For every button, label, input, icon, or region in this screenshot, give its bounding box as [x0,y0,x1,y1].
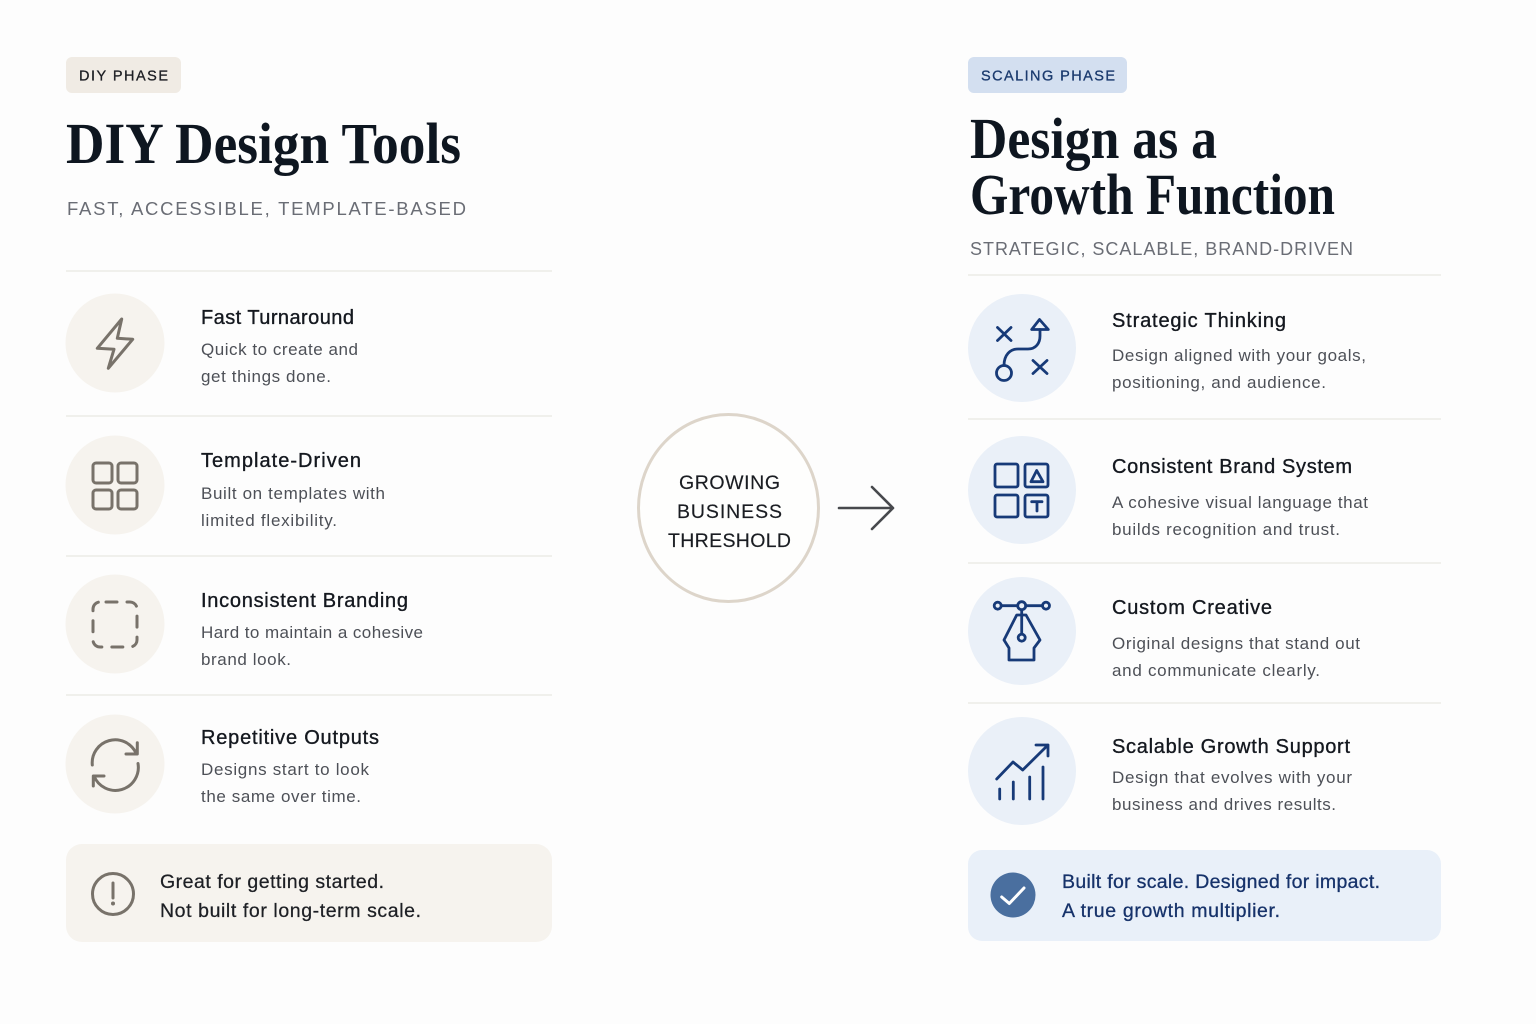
heading: DIY Design Tools: DIY Design Tools [66,111,461,176]
icon: growth chart [968,717,1076,825]
row: Fast Turnaround [66,294,358,392]
text: Repetitive Outputs [201,727,379,806]
row: Scalable Growth Support [968,717,1352,825]
text: Consistent Brand System [1112,456,1368,539]
text: Template-Driven [201,450,385,530]
text: Fast Turnaround [201,307,358,386]
row: Repetitive Outputs [66,714,379,814]
arrow [839,487,893,529]
threshold circle: THRESHOLD [668,530,791,552]
icon: brand system blocks [968,436,1076,544]
heading: Design as a Growth Function: Design as a [970,106,1217,171]
text: Custom Creative: Custom Creative [1112,597,1272,619]
icon: pen tool [968,577,1076,685]
callout: DIY: Not built for long-term scale. [160,900,421,922]
icon: lightning bolt [66,294,164,392]
callout: scaling [968,850,1441,941]
callout: scaling: Built for scale. Designed for impact. [1062,871,1380,893]
icon: refresh arrows [66,714,164,814]
icon: dashed square [66,574,164,674]
threshold circle [638,414,818,602]
text: Scalable Growth Support: business and drives results. [1112,795,1336,814]
icon: check [990,872,1036,918]
heading: Design as a Growth Function [970,106,1335,227]
text: Scalable Growth Support: Scalable Growth Support [1112,736,1350,758]
text: Inconsistent Branding [201,590,423,669]
text: Consistent Brand System: Consistent Brand System [1112,456,1352,478]
text: Scalable Growth Support: Design that evolves with your [1112,768,1352,787]
text: Custom Creative: and communicate clearly. [1112,661,1320,680]
text: Strategic Thinking: positioning, and audience. [1112,373,1326,392]
threshold circle: GROWING [679,472,780,494]
panel: DIY phase [66,57,552,942]
icon: template grid [66,436,164,534]
text: Inconsistent Branding: Inconsistent Branding [201,590,408,612]
text: Consistent Brand System: A cohesive visual language that [1112,493,1368,512]
text: Fast Turnaround: get things done. [201,367,331,386]
badge: DIY phase: DIY PHASE [79,68,168,84]
text: Repetitive Outputs: Repetitive Outputs [201,727,379,749]
text: Custom Creative [1112,597,1360,680]
row: Strategic Thinking [968,294,1366,402]
heading: Design as a Growth Function: Growth Function [970,162,1335,227]
text: Fast Turnaround: Fast Turnaround [201,307,354,329]
text: Scalable Growth Support [1112,736,1352,814]
row: Inconsistent Branding [66,574,423,674]
text: Consistent Brand System: builds recognition and trust. [1112,520,1340,539]
icon: strategy path [968,294,1076,402]
row: Consistent Brand System [968,436,1368,544]
text: Strategic Thinking: Design aligned with your goals, [1112,346,1366,365]
badge: DIY phase [66,57,181,93]
threshold circle: BUSINESS [677,501,782,523]
text: Template-Driven: Template-Driven [201,450,361,472]
text: Strategic Thinking: Strategic Thinking [1112,310,1286,332]
panel: scaling phase [968,57,1441,941]
text: Custom Creative: Original designs that stand out [1112,634,1360,653]
badge: scaling phase [968,57,1127,93]
subtitle: scaling: STRATEGIC, SCALABLE, BRAND-DRIVEN [970,239,1353,259]
text: Fast Turnaround: Quick to create and [201,340,358,359]
callout: DIY [66,844,552,942]
row: Template-Driven [66,436,385,534]
text: Strategic Thinking [1112,310,1366,392]
text: Template-Driven: Built on templates with [201,484,385,503]
badge: scaling phase: SCALING PHASE [981,68,1115,84]
subtitle: DIY: FAST, ACCESSIBLE, TEMPLATE-BASED [67,198,466,219]
text: Repetitive Outputs: Designs start to look [201,760,370,779]
callout: scaling: A true growth multiplier. [1062,900,1280,922]
text: Inconsistent Branding: brand look. [201,650,291,669]
text: Template-Driven: limited flexibility. [201,511,337,530]
text: Inconsistent Branding: Hard to maintain a cohesive [201,623,423,642]
text: Repetitive Outputs: the same over time. [201,787,361,806]
row: Custom Creative [968,577,1360,685]
callout: DIY: Great for getting started. [160,871,384,893]
icon: alert [92,874,134,914]
